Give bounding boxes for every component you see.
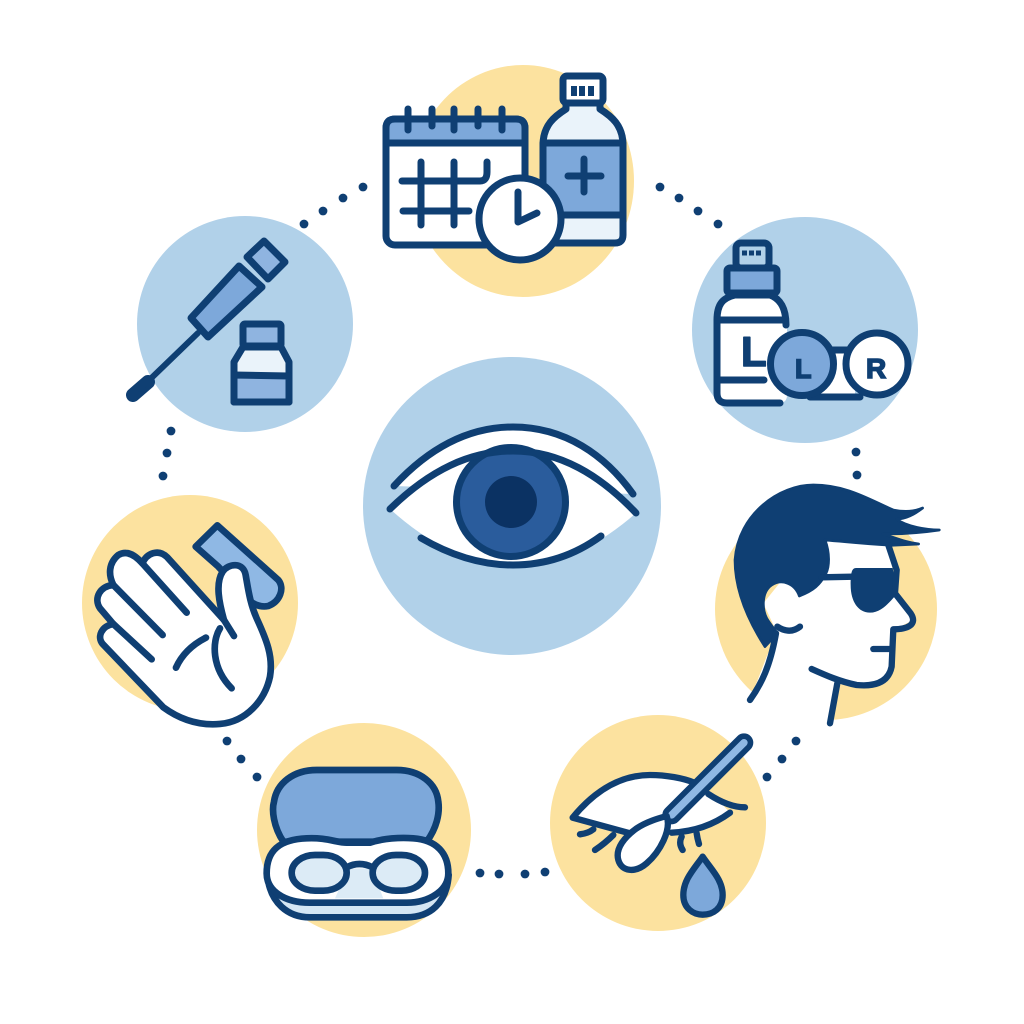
icon: vial bbox=[234, 324, 289, 402]
panel: clean hands bbox=[82, 495, 298, 724]
icon: open lens case bbox=[267, 770, 449, 917]
icon: eyelid with swab bbox=[573, 743, 745, 915]
central eye panel bbox=[363, 357, 661, 655]
panel: left and right labelled storage bbox=[692, 217, 918, 443]
panel: sun protection bbox=[715, 485, 939, 723]
icon: clock bbox=[479, 178, 561, 260]
icon: calendar bbox=[386, 109, 525, 245]
icon: labelled bottle bbox=[717, 243, 787, 403]
big L on bottle: L bbox=[741, 328, 767, 375]
panel: applicator brush and vial bbox=[133, 216, 353, 432]
water drop bbox=[683, 857, 723, 915]
icon: eye bbox=[390, 427, 636, 565]
panel: schedule and solution bbox=[386, 65, 634, 297]
icon: solution bottle bbox=[543, 76, 623, 243]
panel: cleaning the eyelid bbox=[550, 715, 766, 931]
icon: profile head with sunglasses bbox=[735, 485, 939, 723]
icon: hand holding lens bbox=[97, 525, 281, 724]
icon: lens case L R: L bbox=[795, 354, 812, 384]
icon: applicator bbox=[133, 241, 285, 395]
icon: lens case L R bbox=[770, 332, 908, 397]
panel: lens case bbox=[257, 723, 471, 937]
icon: lens case L R: R bbox=[866, 353, 886, 384]
dotted ring connectors bbox=[159, 183, 861, 878]
